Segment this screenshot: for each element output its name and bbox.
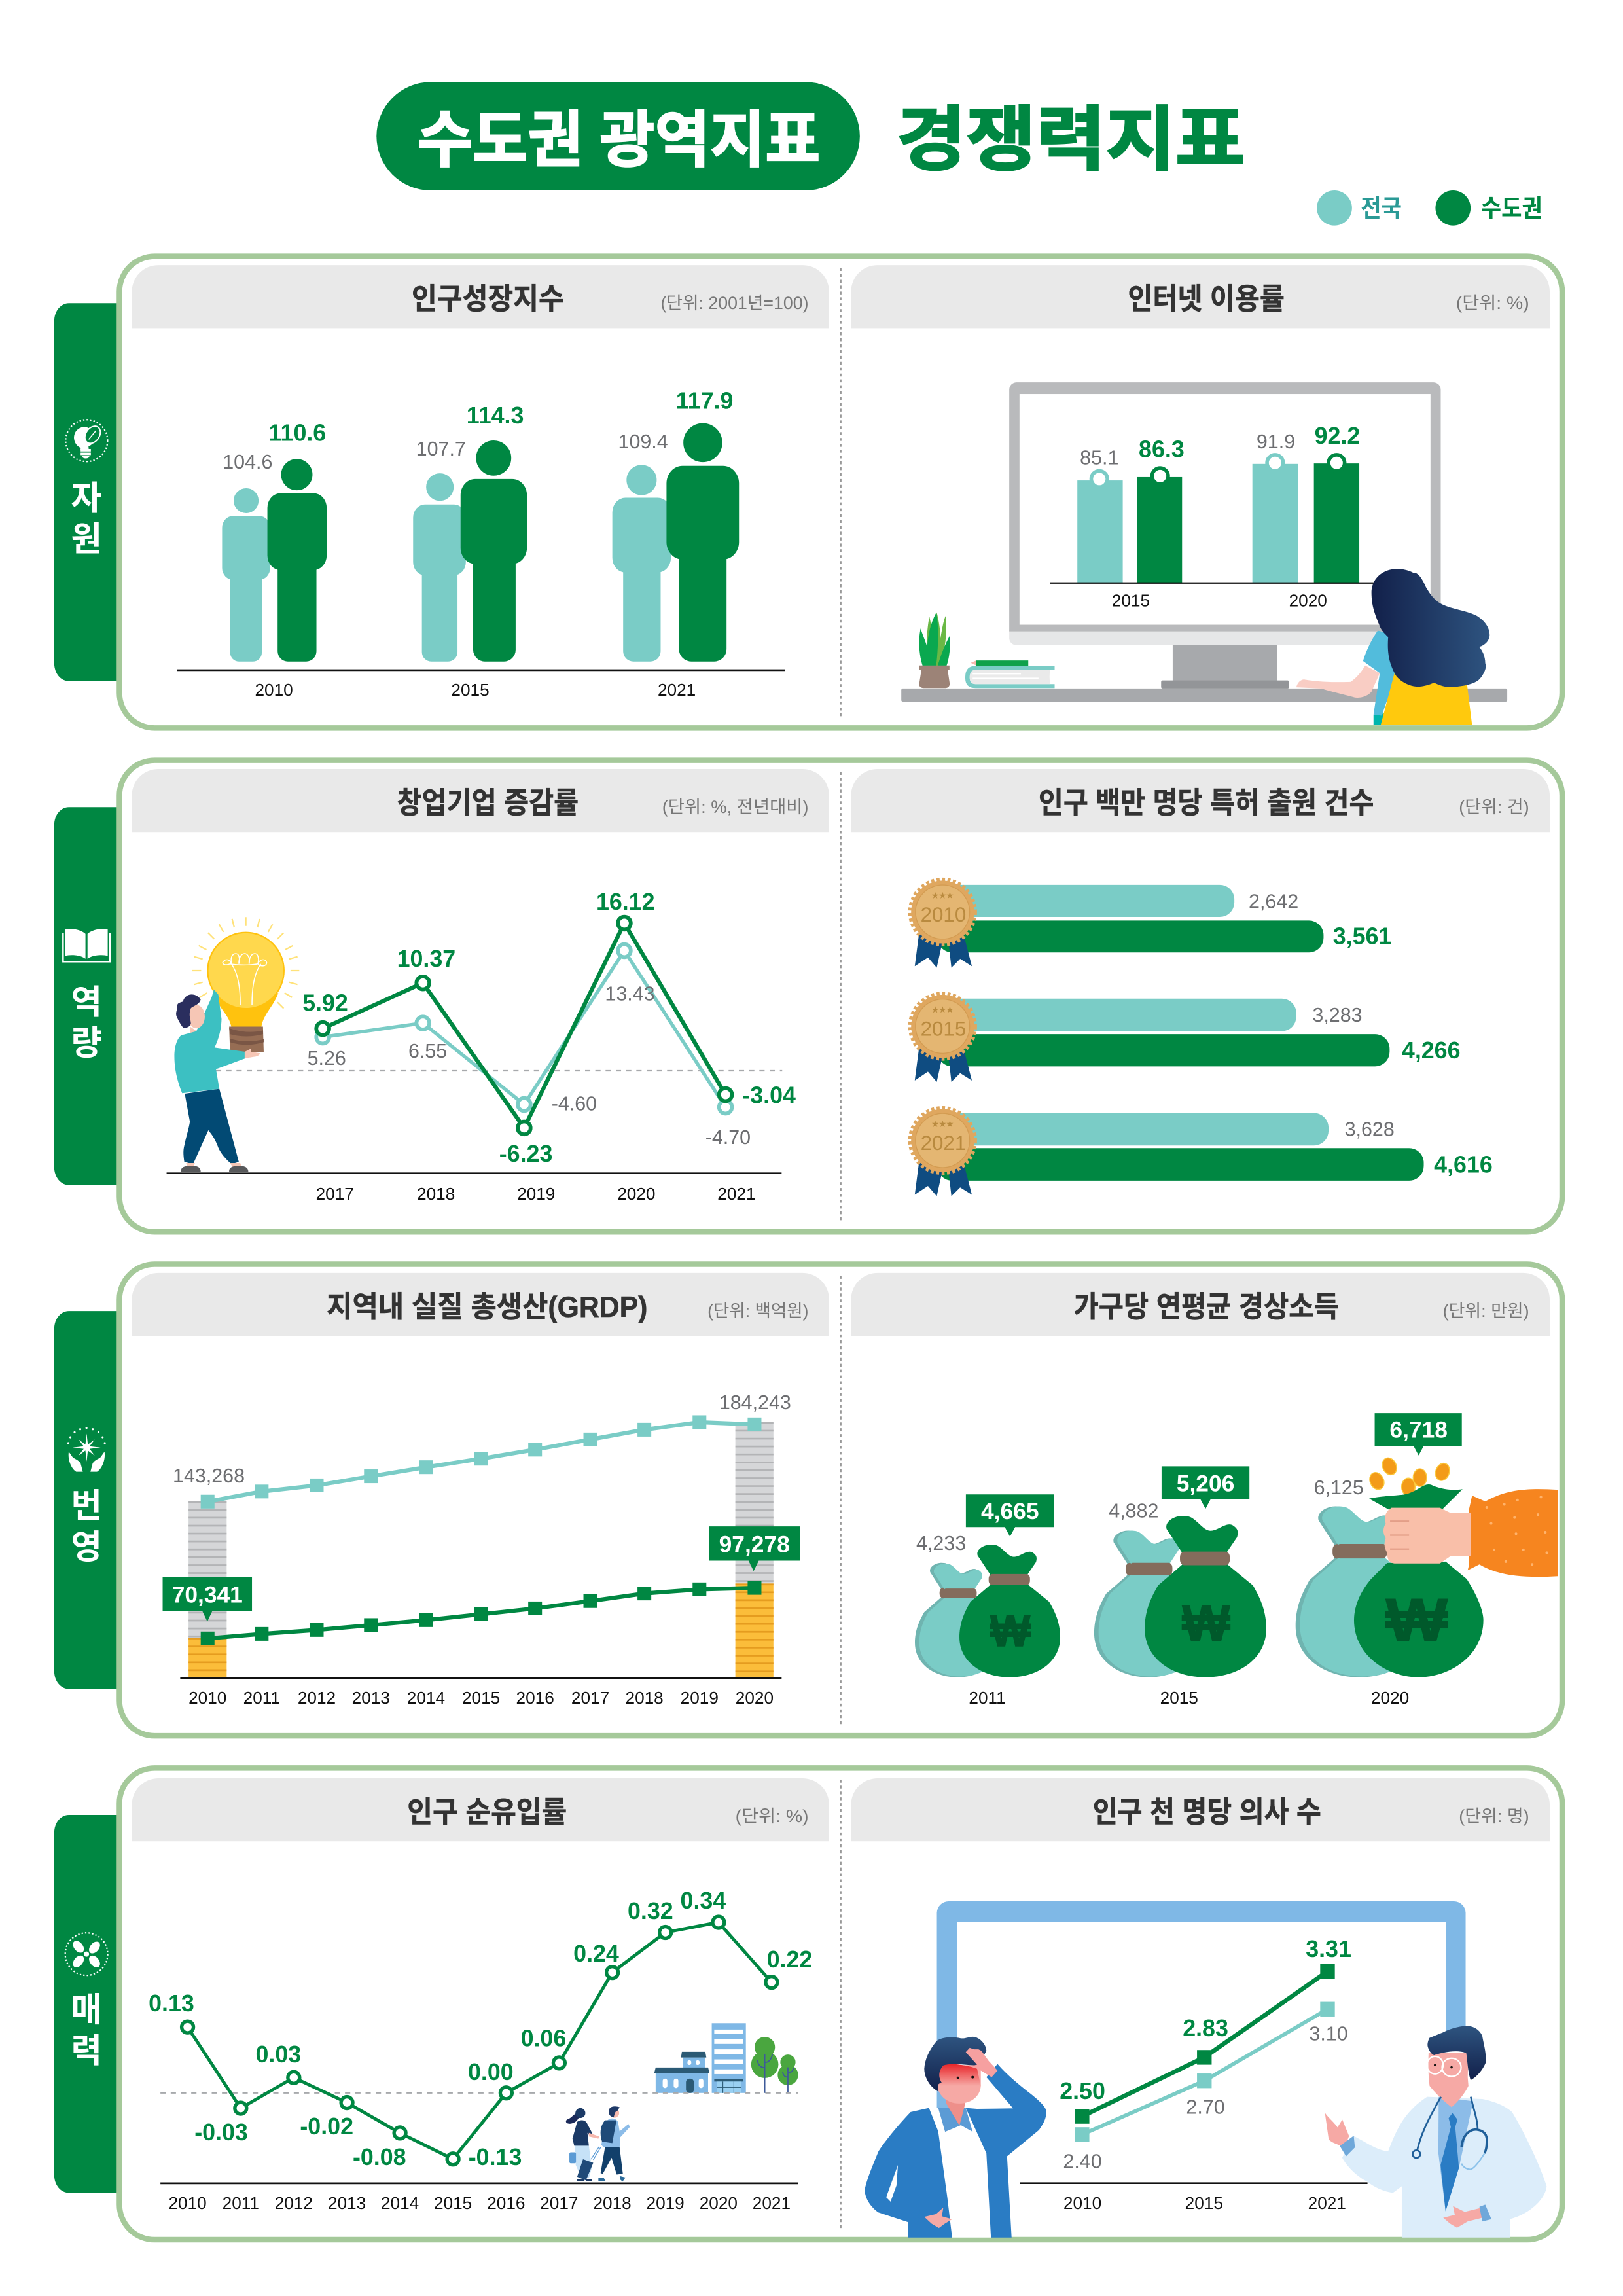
chart: 의사 수 line: 3.31 — [1306, 1936, 1351, 1962]
tab: 역량: 역 — [71, 983, 102, 1021]
chart: 인구성장지수 pictogram: 2010 — [255, 680, 293, 700]
panel: 매력 — [54, 1768, 1562, 2240]
chart: GRDP: 2014 — [407, 1688, 445, 1708]
header: 인터넷 이용률: 인터넷 이용률 — [1128, 283, 1285, 315]
header: 의사 수: 인구 천 명당 의사 수 — [1093, 1796, 1321, 1829]
chart: 특허 출원 건수 bars 2015: 3,283 — [1312, 1004, 1363, 1026]
coin column 2020 — [736, 1422, 774, 1677]
tab: 자원 — [54, 303, 122, 681]
chart: 특허 출원 건수 bars 2010: ★★★ — [932, 892, 954, 900]
title pill: 수도권 광역지표 — [418, 105, 820, 174]
chart: 의사 수 line: 2021 — [1308, 2193, 1346, 2213]
chart: 인구 순유입률 line: -0.13 — [469, 2144, 522, 2170]
chart: 창업기업 증감률 line: 2017 — [316, 1184, 354, 1204]
callout 97,278 — [709, 1526, 800, 1571]
chart: 인터넷 이용률 bars: 85.1 — [1080, 446, 1118, 469]
header: 인구 순유입률 — [132, 1778, 829, 1841]
tab: 매력 — [54, 1815, 122, 2193]
illustration: plant — [919, 613, 950, 688]
coin column 2010 — [188, 1501, 226, 1677]
chart: 인구 순유입률 line: 0.24 — [573, 1941, 619, 1967]
illustration: blue frame — [937, 1901, 1466, 2109]
chart: 인구 순유입률 line: 0.32 — [628, 1898, 673, 1924]
chart: 창업기업 증감률 line: -4.60 — [552, 1092, 597, 1115]
chart: 창업기업 증감률 line: 10.37 — [397, 946, 455, 972]
chart: 인구 순유입률 line: -0.03 — [194, 2119, 248, 2145]
chart: 인터넷 이용률 bars — [1050, 423, 1377, 611]
chart: 특허 출원 건수 bars 2010: 2,642 — [1249, 891, 1298, 913]
illustration: coins — [1367, 1456, 1452, 1496]
chart: 창업기업 증감률 line: -6.23 — [499, 1141, 552, 1167]
chart: money bags 2015 — [1094, 1466, 1266, 1708]
callout 70,341 — [163, 1577, 252, 1622]
chart: money bags 2011: 2011 — [969, 1688, 1006, 1708]
chart: 인구 순유입률 line: 0.03 — [255, 2041, 301, 2068]
chart: 특허 출원 건수 bars 2015 — [911, 995, 1461, 1082]
title — [376, 82, 1245, 190]
illustration: hand — [1383, 1489, 1558, 1577]
legend: 전국 — [1361, 195, 1402, 222]
chart: money bags 2015: ₩ — [1182, 1594, 1230, 1652]
legend — [1317, 190, 1543, 226]
title pill — [376, 82, 860, 190]
chart: 인구 순유입률 line: -0.08 — [353, 2144, 406, 2170]
header: 인구 순유입률: (단위: %) — [736, 1806, 809, 1826]
chart: 특허 출원 건수 bars 2010: 3,561 — [1333, 923, 1391, 949]
chart: 인구 순유입률 line — [149, 1888, 812, 2213]
tab: 매력: 매 — [71, 1991, 102, 2029]
illustration: travelers — [566, 2106, 630, 2181]
illustration: buildings and trees — [654, 2023, 798, 2093]
callout 5,206 — [1162, 1466, 1249, 1509]
chart: GRDP — [163, 1391, 800, 1708]
header: 창업기업 증감률: (단위: %, 전년대비) — [662, 797, 809, 817]
chart: 창업기업 증감률 line: -3.04 — [742, 1082, 796, 1108]
chart: 의사 수 line: 2.40 — [1063, 2150, 1102, 2172]
header: 특허 출원 건수: (단위: 건) — [1459, 797, 1529, 817]
chart: GRDP: 143,268 — [173, 1465, 245, 1487]
illustration: monitor and desk — [901, 382, 1507, 702]
header: 의사 수: (단위: 명) — [1459, 1806, 1529, 1826]
chart: 인구 순유입률 line: 2017 — [540, 2193, 578, 2213]
chart: 인구성장지수 pictogram: 114.3 — [467, 403, 524, 429]
chart: 인구 순유입률 line: 0.00 — [468, 2059, 514, 2085]
header: GRDP: 지역내 실질 총생산(GRDP) — [327, 1291, 647, 1323]
chart: GRDP: 2015 — [462, 1688, 500, 1708]
tab: 매력: 력 — [71, 2032, 102, 2070]
chart: 인구 순유입률 line: 2019 — [647, 2193, 685, 2213]
chart: 인구성장지수 pictogram: 2015 — [451, 680, 490, 700]
chart: 인구 순유입률 line: 0.34 — [681, 1888, 726, 1914]
chart: money bags 2015: 2015 — [1160, 1688, 1198, 1708]
header: GRDP: (단위: 백억원) — [707, 1301, 809, 1321]
tab: 번영 — [54, 1311, 122, 1689]
chart: 인구 순유입률 line: 2014 — [381, 2193, 419, 2213]
chart: 인구성장지수 pictogram: 109.4 — [618, 431, 668, 453]
chart: 창업기업 증감률 line: 6.55 — [408, 1040, 447, 1062]
callout 6,718: 6,718 — [1389, 1418, 1448, 1443]
callout 4,665 — [966, 1494, 1054, 1537]
header: 특허 출원 건수 — [851, 769, 1550, 832]
tab: 역량: 량 — [71, 1024, 102, 1062]
chart: 의사 수 line: 2.83 — [1183, 2015, 1228, 2041]
panel: 역량 — [54, 761, 1562, 1232]
header: 특허 출원 건수: 인구 백만 명당 특허 출원 건수 — [1039, 787, 1374, 819]
chart: money bags 2020: ₩ — [1385, 1586, 1448, 1655]
chart: 인구성장지수 pictogram: 107.7 — [416, 438, 466, 460]
header: 인구성장지수: 인구성장지수 — [412, 283, 564, 315]
chart: money bags 2011 — [915, 1494, 1060, 1708]
panel: 자원 — [54, 257, 1562, 728]
chart: 특허 출원 건수 bars 2015: 2015 — [921, 1017, 966, 1040]
chart: 창업기업 증감률 line: 13.43 — [605, 983, 655, 1005]
chart: 인구 순유입률 line: 2021 — [753, 2193, 791, 2213]
chart: 인구 순유입률 line: 2010 — [168, 2193, 207, 2213]
callout 4,665: 4,665 — [981, 1499, 1039, 1524]
chart: money bags 2020: 6,125 — [1314, 1477, 1364, 1499]
chart: 의사 수 line: 2010 — [1063, 2193, 1101, 2213]
header: GRDP — [132, 1273, 829, 1336]
illustration: doctor — [1325, 2026, 1546, 2238]
header: 의사 수 — [851, 1778, 1550, 1841]
chart: 창업기업 증감률 line: 16.12 — [596, 889, 655, 915]
tab: 자원: 원 — [71, 520, 102, 558]
chart: 인구 순유입률 line: 2011 — [223, 2193, 259, 2213]
callout 6,718 — [1375, 1413, 1462, 1456]
legend: 수도권 — [1481, 195, 1543, 222]
chart: GRDP: 2017 — [571, 1688, 609, 1708]
chart: 창업기업 증감률 line — [167, 889, 796, 1204]
tab: 자원: 자 — [71, 479, 102, 517]
illustration: man holding light bulb — [174, 917, 299, 1172]
title right: 경쟁력지표 — [897, 101, 1245, 179]
illustration: woman at computer — [1296, 569, 1489, 725]
header: 인터넷 이용률: (단위: %) — [1456, 293, 1529, 313]
chart: 인구 순유입률 line: 2018 — [594, 2193, 632, 2213]
chart: 특허 출원 건수 bars 2015: ★★★ — [932, 1007, 954, 1014]
chart: 인구 순유입률 line: 0.13 — [149, 1990, 194, 2017]
chart: 인터넷 이용률 bars: 92.2 — [1315, 423, 1360, 449]
chart: 의사 수 line: 2.70 — [1186, 2096, 1225, 2119]
header: 경상소득: 가구당 연평균 경상소득 — [1074, 1291, 1339, 1323]
chart: GRDP: 2020 — [736, 1688, 774, 1708]
chart: 인구성장지수 pictogram: 104.6 — [223, 451, 272, 473]
callout 70,341: 70,341 — [172, 1582, 243, 1607]
chart: 의사 수 line: 2015 — [1185, 2193, 1223, 2213]
header: 창업기업 증감률 — [132, 769, 829, 832]
chart: money bags 2015: 4,882 — [1109, 1500, 1158, 1522]
chart: GRDP: 2019 — [681, 1688, 719, 1708]
chart: 특허 출원 건수 bars 2021: 3,628 — [1345, 1119, 1395, 1141]
chart: money bags 2020 — [1296, 1413, 1558, 1708]
chart: 인구 순유입률 line: 2016 — [487, 2193, 525, 2213]
chart: 인구 순유입률 line: 2020 — [700, 2193, 738, 2213]
header: 인구성장지수: (단위: 2001년=100) — [660, 293, 809, 313]
chart: money bags 2011: 4,233 — [916, 1532, 966, 1554]
chart: 인구 순유입률 line: 2013 — [328, 2193, 366, 2213]
panel: 번영 — [54, 1264, 1562, 1736]
chart: 인터넷 이용률 bars: 91.9 — [1257, 431, 1295, 453]
header: 창업기업 증감률: 창업기업 증감률 — [397, 787, 579, 819]
chart: 의사 수 line: 2.50 — [1060, 2078, 1105, 2104]
illustration: books — [965, 660, 1055, 688]
chart: money bags 2020: 2020 — [1371, 1688, 1409, 1708]
chart: 인구성장지수 pictogram: 117.9 — [676, 387, 733, 414]
chart: 인구성장지수 pictogram: 110.6 — [269, 420, 326, 446]
tab: 번영: 영 — [71, 1528, 102, 1566]
chart: 창업기업 증감률 line: -4.70 — [705, 1126, 751, 1149]
tab: 번영: 번 — [71, 1487, 102, 1525]
chart: 의사 수 line: 3.10 — [1309, 2023, 1348, 2045]
chart: 인터넷 이용률 bars: 2015 — [1112, 591, 1150, 611]
chart: 특허 출원 건수 bars 2010: 2010 — [921, 903, 966, 926]
illustration: tired man — [865, 2037, 1046, 2238]
callout 97,278: 97,278 — [719, 1532, 790, 1557]
header: 인구 순유입률: 인구 순유입률 — [407, 1796, 567, 1829]
chart: 특허 출원 건수 bars 2015: 4,266 — [1402, 1037, 1461, 1064]
callout 5,206: 5,206 — [1177, 1471, 1234, 1496]
chart: 의사 수 line — [1020, 1936, 1368, 2213]
chart: GRDP: 2018 — [626, 1688, 664, 1708]
chart: 특허 출원 건수 bars 2021: ★★★ — [932, 1121, 954, 1128]
chart: 창업기업 증감률 line: 2020 — [617, 1184, 655, 1204]
chart: 인터넷 이용률 bars: 2020 — [1289, 591, 1327, 611]
header: 경상소득 — [851, 1273, 1550, 1336]
chart: 인구 순유입률 line: 2015 — [434, 2193, 472, 2213]
chart: GRDP: 2011 — [243, 1688, 280, 1708]
chart: 인구 순유입률 line: 0.06 — [521, 2026, 566, 2052]
chart: 특허 출원 건수 bars 2021 — [911, 1109, 1493, 1196]
tab: 역량 — [54, 807, 122, 1185]
chart: 창업기업 증감률 line: 2019 — [517, 1184, 555, 1204]
chart: 특허 출원 건수 bars 2021: 4,616 — [1434, 1152, 1493, 1178]
chart: 창업기업 증감률 line: 5.26 — [308, 1047, 346, 1069]
chart: 창업기업 증감률 line: 5.92 — [302, 990, 348, 1016]
chart: 특허 출원 건수 bars 2021: 2021 — [921, 1132, 966, 1155]
chart: 인구성장지수 pictogram: 2021 — [658, 680, 696, 700]
header: 인구성장지수 — [132, 265, 829, 328]
chart: 특허 출원 건수 bars 2010 — [911, 880, 1391, 967]
chart: 인터넷 이용률 bars: 86.3 — [1139, 436, 1185, 462]
chart: GRDP: 2012 — [298, 1688, 336, 1708]
chart: money bags 2011: ₩ — [990, 1605, 1031, 1657]
chart: 창업기업 증감률 line: 2021 — [717, 1184, 756, 1204]
chart: 인구성장지수 pictogram — [177, 387, 785, 700]
chart: 인구 순유입률 line: 2012 — [275, 2193, 313, 2213]
chart: GRDP: 184,243 — [719, 1391, 791, 1414]
chart: GRDP: 2016 — [516, 1688, 554, 1708]
chart: 인구 순유입률 line: 0.22 — [767, 1946, 812, 1973]
chart: GRDP: 2010 — [188, 1688, 226, 1708]
chart: 창업기업 증감률 line: 2018 — [417, 1184, 455, 1204]
chart: GRDP: 2013 — [352, 1688, 390, 1708]
header: 경상소득: (단위: 만원) — [1443, 1301, 1529, 1321]
header: 인터넷 이용률 — [851, 265, 1550, 328]
chart: 인구 순유입률 line: -0.02 — [300, 2113, 353, 2140]
